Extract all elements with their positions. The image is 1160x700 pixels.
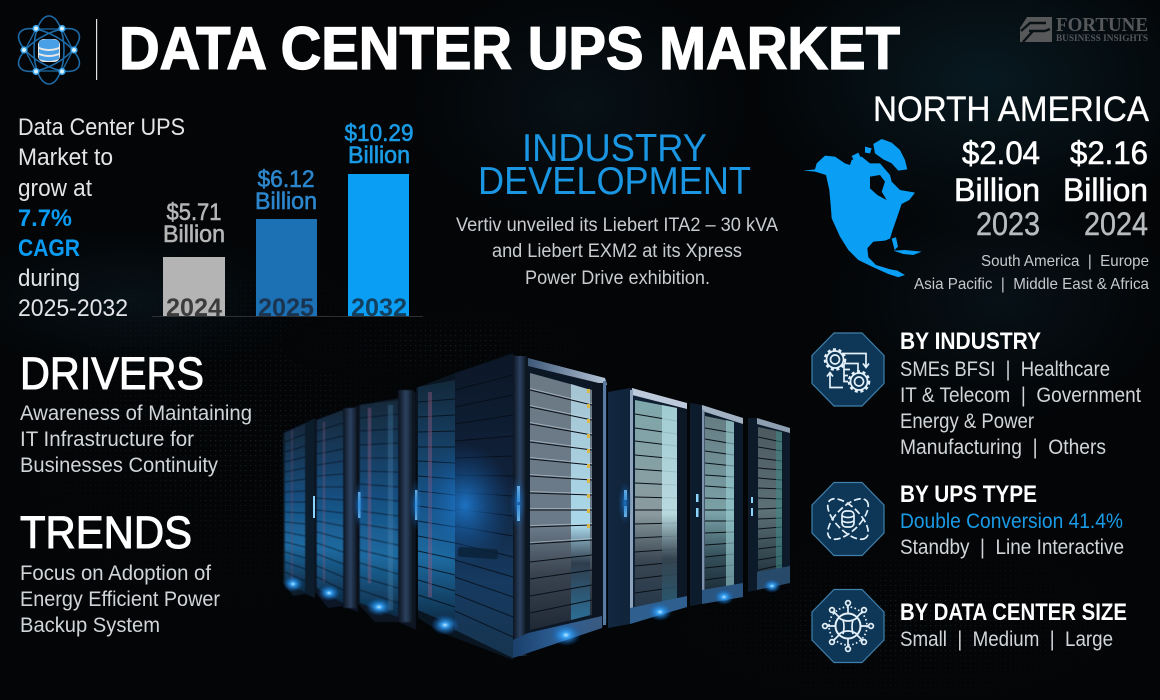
panel: by data center size: Small | Medium | Large — [900, 628, 1113, 651]
panel: North America values: Billion — [1063, 172, 1148, 208]
bar 2024: 2024 — [166, 294, 222, 322]
panel: North America values: $2.16 — [1070, 135, 1148, 171]
logo: Fortune Business Insights — [1020, 14, 1148, 43]
bar 2024: $5.71 — [166, 199, 222, 226]
panel: North America values: 2023 — [976, 206, 1040, 242]
panel: trends — [20, 507, 220, 637]
panel: North America values: Billion — [954, 172, 1040, 208]
panel: industry development — [456, 127, 778, 289]
panel: by industry: IT & Telecom | Government — [900, 384, 1141, 407]
text: CAGR statement: grow at — [18, 175, 92, 202]
text: CAGR statement: 2025-2032 — [18, 295, 128, 322]
panel: North America values: $2.04 — [962, 135, 1040, 171]
panel: by industry: Energy & Power — [900, 410, 1034, 433]
panel: drivers — [20, 348, 252, 477]
icon: atom database logo — [12, 16, 86, 84]
panel: drivers: DRIVERS — [20, 348, 204, 399]
text: CAGR statement: 7.7% — [18, 205, 72, 232]
bar 2025: $6.12 — [258, 166, 314, 193]
bar 2025 — [255, 166, 317, 322]
panel: industry development: INDUSTRY — [522, 127, 707, 170]
logo: Fortune Business Insights: FORTUNE — [1056, 14, 1148, 36]
text: CAGR statement — [18, 114, 185, 322]
panel: industry development: Power Drive exhibition. — [525, 268, 710, 289]
text: CAGR statement: during — [18, 265, 80, 292]
panel: drivers: Awareness of Maintaining — [20, 402, 252, 425]
bar 2032: $10.29 — [344, 120, 414, 147]
panel: by industry: SMEs BFSI | Healthcare — [900, 358, 1110, 381]
panel: industry development: Vertiv unveiled its Liebert ITA2 – 30 kVA — [456, 215, 778, 236]
rack B — [358, 390, 416, 630]
logo: Fortune Business Insights: BUSINESS INSIGHTS — [1056, 33, 1148, 43]
panel: by data center size — [812, 590, 1127, 662]
panel: North America values: 2024 — [1084, 206, 1148, 242]
rack 2 — [608, 388, 687, 628]
panel: trends: Focus on Adoption of — [20, 562, 211, 585]
bar 2024: Billion — [163, 221, 225, 248]
title: DATA CENTER UPS MARKET — [119, 15, 900, 82]
panel: industry development: and Liebert EXM2 at its Xpress — [492, 241, 742, 262]
panel: by UPS type: BY UPS TYPE — [900, 481, 1037, 508]
bar 2025: 2025 — [258, 294, 314, 322]
panel: trends: TRENDS — [20, 507, 192, 558]
map: North America — [803, 139, 922, 277]
panel: drivers: Businesses Continuity — [20, 454, 218, 477]
panel: North America values — [873, 90, 1150, 293]
panel: by UPS type — [812, 481, 1124, 559]
bar 2032: Billion — [348, 142, 410, 169]
icon: orbiting database — [812, 482, 884, 556]
bar 2032 — [344, 120, 414, 322]
panel: North America values: NORTH AMERICA — [873, 90, 1150, 129]
title divider — [96, 19, 97, 80]
rack 3 — [690, 403, 743, 606]
text: CAGR statement: CAGR — [18, 235, 80, 262]
icon: gears and database — [812, 333, 884, 406]
panel: drivers: IT Infrastructure for — [20, 428, 194, 451]
bar 2024 — [163, 199, 225, 322]
panel: by industry: BY INDUSTRY — [900, 328, 1041, 355]
rack A main left side — [416, 353, 513, 660]
rack 1 main front — [513, 355, 607, 658]
rack C — [315, 406, 358, 612]
panel: North America values: Asia Pacific | Middle East & Africa — [914, 276, 1149, 293]
panel: trends: Energy Efficient Power — [20, 588, 220, 611]
panel: by UPS type: Double Conversion 41.4% — [900, 510, 1123, 533]
rack D far left — [283, 418, 315, 598]
bar 2025: Billion — [255, 188, 317, 215]
text: CAGR statement: Market to — [18, 144, 113, 171]
rack 4 far right — [748, 418, 790, 592]
panel: industry development: DEVELOPMENT — [478, 160, 751, 203]
panel: North America values: South America | Europe — [981, 253, 1149, 270]
bar 2032: 2032 — [351, 294, 407, 322]
text: CAGR statement: Data Center UPS — [18, 114, 185, 141]
panel: by industry: Manufacturing | Others — [900, 436, 1106, 459]
glowing indicators — [283, 475, 781, 646]
icon: network wheel — [812, 590, 884, 662]
panel: by industry — [812, 328, 1141, 459]
panel: by data center size: BY DATA CENTER SIZE — [900, 599, 1127, 626]
panel: by UPS type: Standby | Line Interactive — [900, 536, 1124, 559]
panel: trends: Backup System — [20, 614, 160, 637]
bar chart — [152, 120, 423, 322]
illustration: server racks — [283, 353, 790, 660]
